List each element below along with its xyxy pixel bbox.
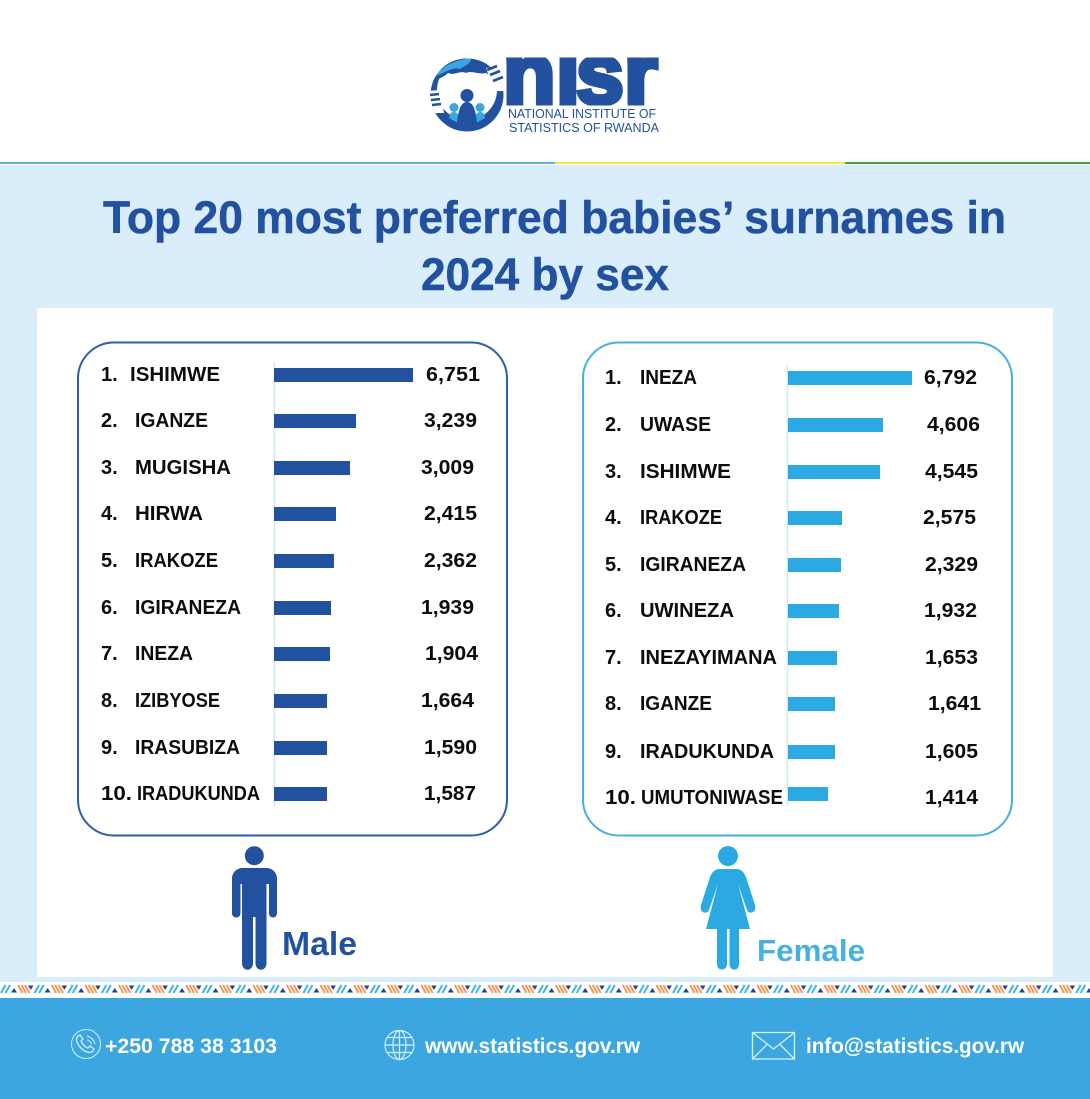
row: male 5 [101, 550, 477, 572]
row: male 10 [101, 783, 476, 805]
row: female 7 [605, 647, 978, 669]
row: female 3: 4,545 [925, 461, 978, 483]
row: female 4: IRAKOZE [640, 507, 722, 529]
row: male 10: IRADUKUNDA [137, 783, 260, 805]
background band [0, 165, 1090, 982]
icon: NISR circular emblem [430, 58, 504, 132]
title: Top 20 most preferred babies’ surnames in [103, 192, 1006, 243]
white content panel [37, 308, 1053, 977]
row: female 4: 2,575 [923, 507, 976, 529]
row: male 3: 3,009 [421, 457, 474, 479]
row: female 4 [605, 507, 976, 529]
row: male 2 [101, 410, 477, 432]
row: female 7: INEZAYIMANA [640, 647, 777, 669]
row: male 1: 6,751 [426, 364, 480, 386]
row: female 3: 3. [605, 461, 622, 483]
icon: globe [385, 1030, 414, 1060]
row: female 5: 5. [605, 554, 622, 576]
logo subtitle [508, 107, 660, 135]
tricolour rule [0, 162, 1090, 164]
row: male 7: INEZA [135, 643, 193, 665]
row: female 2: 2. [605, 414, 622, 436]
row: male 7: 7. [101, 643, 118, 665]
row: female 6 [605, 600, 977, 622]
row: male 2: IGANZE [135, 410, 208, 432]
logo subtitle: STATISTICS OF RWANDA [509, 121, 660, 135]
row: female 10: UMUTONIWASE [641, 787, 783, 809]
row: male 1 [101, 364, 480, 386]
title: 2024 by sex [421, 249, 669, 300]
row: female 1: 6,792 [924, 367, 977, 389]
row: female 6: 6. [605, 600, 622, 622]
row: female 6: UWINEZA [640, 600, 734, 622]
row: female 9 [605, 741, 978, 763]
text: phone number: +250 788 38 3103 [105, 1035, 277, 1058]
row: male 7: 1,904 [425, 643, 479, 665]
row: male 8 [101, 690, 475, 712]
row: female 6: 1,932 [924, 600, 977, 622]
row: female 9: 9. [605, 741, 622, 763]
row: female 10: 10. [605, 787, 636, 809]
icon: female figure [701, 846, 755, 970]
row: female 1: 1. [605, 367, 622, 389]
text: website: www.statistics.gov.rw [424, 1035, 641, 1058]
row: male 6 [101, 597, 474, 619]
logo wordmark: nisr [503, 26, 657, 122]
row: female 7: 1,653 [925, 647, 978, 669]
footer [0, 998, 1090, 1099]
row: female 8: 8. [605, 693, 622, 715]
panel: male surnames [78, 342, 507, 836]
icon: male figure [232, 846, 277, 970]
panel: female surnames [583, 342, 1012, 836]
row: male 4: 4. [101, 503, 118, 525]
text: email: info@statistics.gov.rw [806, 1035, 1025, 1058]
row: male 3: MUGISHA [135, 457, 231, 479]
row: male 9 [101, 737, 477, 759]
row: male 9: 1,590 [424, 737, 477, 759]
decorative pattern strip [0, 982, 1090, 998]
logo: NISR [430, 58, 659, 132]
row: female 8 [605, 693, 981, 715]
row: male 4: 2,415 [424, 503, 477, 525]
row: female 1: INEZA [640, 367, 697, 389]
row: female 2: UWASE [640, 414, 711, 436]
row: male 5: 5. [101, 550, 118, 572]
row: male 3: 3. [101, 457, 118, 479]
row: female 10 [605, 787, 979, 809]
row: male 2: 2. [101, 410, 118, 432]
title [103, 192, 1006, 300]
logo subtitle: NATIONAL INSTITUTE OF [508, 107, 656, 121]
row: female 9: 1,605 [925, 741, 978, 763]
row: female 5 [605, 554, 978, 576]
row: male 7 [101, 643, 479, 665]
row: female 8: IGANZE [640, 693, 712, 715]
row: male 5: IRAKOZE [135, 550, 218, 572]
row: female 2: 4,606 [927, 414, 980, 436]
row: female 8: 1,641 [928, 693, 981, 715]
row: female 5: 2,329 [925, 554, 978, 576]
icon: envelope [752, 1032, 794, 1059]
logo wordmark [506, 58, 659, 106]
row: female 4: 4. [605, 507, 622, 529]
row: male 6: IGIRANEZA [135, 597, 241, 619]
row: male 10: 1,587 [424, 783, 476, 805]
row: female 1 [605, 367, 977, 389]
row: male 3 [101, 457, 474, 479]
row: male 1: ISHIMWE [130, 364, 220, 386]
row: male 4 [101, 503, 477, 525]
icon: phone [72, 1030, 100, 1058]
row: male 9: IRASUBIZA [135, 737, 240, 759]
row: male 1: 1. [101, 364, 118, 386]
row: male 2: 3,239 [424, 410, 477, 432]
row: male 8: IZIBYOSE [135, 690, 220, 712]
row: female 2 [605, 414, 980, 436]
row: female 10: 1,414 [925, 787, 979, 809]
row: male 6: 1,939 [421, 597, 474, 619]
row: male 4: HIRWA [135, 503, 203, 525]
row: male 5: 2,362 [424, 550, 477, 572]
row: female 7: 7. [605, 647, 622, 669]
row: female 9: IRADUKUNDA [640, 741, 774, 763]
label: Male: Male [282, 925, 357, 962]
row: female 3 [605, 461, 978, 483]
label: Female: Female [757, 933, 865, 968]
row: male 6: 6. [101, 597, 118, 619]
row: male 9: 9. [101, 737, 118, 759]
row: male 8: 1,664 [421, 690, 475, 712]
row: male 10: 10. [101, 783, 132, 805]
row: female 3: ISHIMWE [640, 461, 731, 483]
row: male 8: 8. [101, 690, 118, 712]
row: female 5: IGIRANEZA [640, 554, 746, 576]
